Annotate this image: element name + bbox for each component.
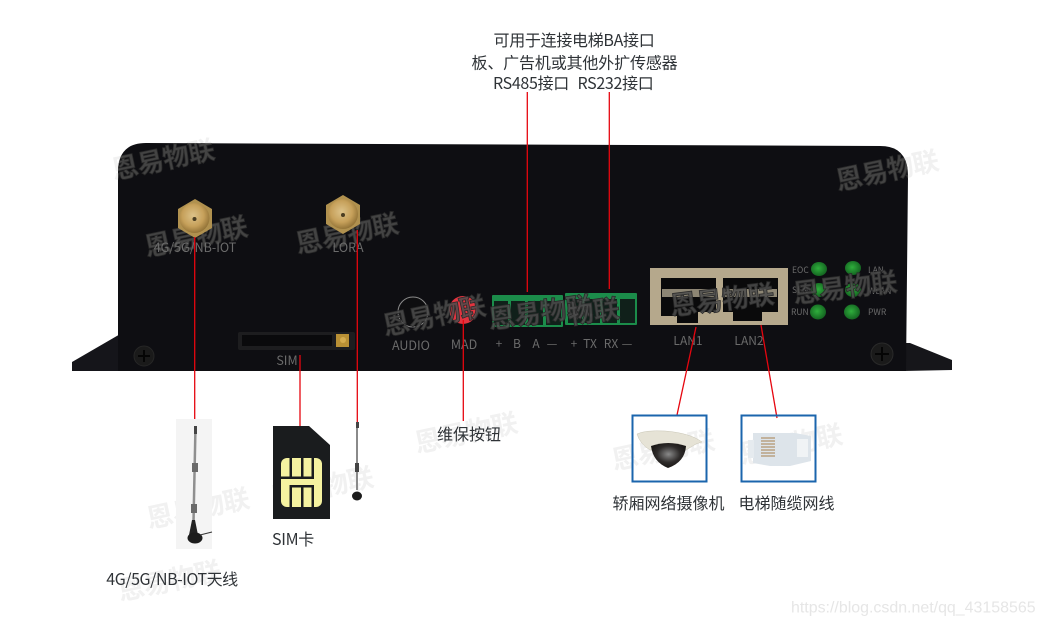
RS232 terminal block: RX xyxy=(604,335,618,352)
AUDIO jack: AUDIO xyxy=(392,335,430,354)
RS485 terminal block: — xyxy=(547,335,558,352)
connector: LORA SMA: LORA xyxy=(332,237,364,256)
light watermarks on the white background: 恩易物联 xyxy=(108,128,217,187)
top callout text: 可用于连接电梯BA接口 xyxy=(494,27,654,51)
top callout text: RS232接口 xyxy=(578,70,654,94)
label: car network camera: 轿厢网络摄像机 xyxy=(612,490,725,514)
RS232 terminal block: + xyxy=(571,335,578,352)
antenna: 4G/5G/NB-IoT xyxy=(176,419,212,549)
light watermarks on the white background: 恩易物联 xyxy=(267,455,376,515)
light watermarks on the white background xyxy=(108,128,942,609)
connector: LORA SMA xyxy=(326,195,364,256)
icon: elevator cable RJ45 plug xyxy=(742,416,816,482)
light watermarks on the white background: 恩易物联 xyxy=(736,412,845,472)
LAN ports: LAN1 xyxy=(673,332,703,349)
connector: 4G/5G/NB-IoT SMA: 4G/5G/NB-IOT xyxy=(154,237,237,256)
status LEDs: LAN xyxy=(868,264,884,276)
leader lines xyxy=(195,92,777,428)
RS232 terminal block xyxy=(565,293,637,352)
light watermarks on the white background: 恩易物联 xyxy=(608,418,717,478)
dark watermarks over the ports xyxy=(384,269,898,336)
light watermarks on the white background: 恩易物联 xyxy=(832,139,942,198)
SIM slot xyxy=(238,332,355,369)
light watermarks on the white background: 恩易物联 xyxy=(114,549,224,609)
dark watermarks behind the antenna connectors: 恩易物联 xyxy=(832,139,942,198)
dark watermarks behind the antenna connectors: 恩易物联 xyxy=(292,202,401,261)
label: 4G/5G/NB-IoT antenna: 4G/5G/NB-IOT天线 xyxy=(106,566,238,590)
label: elevator cable: 电梯随缆网线 xyxy=(738,490,835,514)
RS485 terminal block: A xyxy=(532,335,540,352)
light watermarks on the white background: 恩易物联 xyxy=(143,476,252,536)
status LEDs xyxy=(791,261,891,320)
icon: car network camera xyxy=(632,416,706,482)
dark watermarks behind the antenna connectors: 恩易物联 xyxy=(141,205,250,264)
chassis body xyxy=(118,143,908,371)
SIM slot: SIM xyxy=(276,350,298,369)
dark watermarks over the ports: 恩易物联 xyxy=(791,260,899,311)
dark watermarks over the ports: 恩易物联 xyxy=(379,284,489,344)
right mounting flange xyxy=(904,343,952,371)
icon: SIM card xyxy=(273,426,330,519)
source URL watermark: https://blog.csdn.net/qq_43158565 xyxy=(791,600,1036,616)
top callout text xyxy=(471,27,678,94)
top callout text: RS485接口 xyxy=(493,70,569,94)
LAN ports xyxy=(650,268,788,349)
label: maintenance button: 维保按钮 xyxy=(437,421,501,445)
dark watermarks over the ports: 恩易物联 xyxy=(486,284,594,337)
AUDIO jack xyxy=(392,297,430,354)
connector: 4G/5G/NB-IoT SMA xyxy=(154,199,237,256)
MAD button: MAD xyxy=(451,334,477,353)
dark watermarks behind the antenna connectors xyxy=(108,128,942,264)
RS485 terminal block: B xyxy=(513,335,521,352)
status LEDs: SEN xyxy=(792,284,808,296)
RS485 terminal block: + xyxy=(496,335,503,352)
top callout text: 板、广告机或其他外扩传感器 xyxy=(471,50,678,74)
status LEDs: PWR xyxy=(868,306,887,318)
light watermarks on the white background: 恩易物联 xyxy=(411,401,520,461)
antenna: LoRa xyxy=(352,422,362,500)
MAD button xyxy=(449,296,477,353)
status LEDs: WLAN xyxy=(868,285,891,297)
status LEDs: RUN xyxy=(791,306,809,318)
dark watermarks over the ports: 物联 xyxy=(564,287,621,332)
status LEDs: EOC xyxy=(792,264,809,276)
LAN ports: LAN2 xyxy=(734,332,764,349)
left mounting flange xyxy=(72,333,122,371)
device: gateway front panel xyxy=(72,128,952,371)
RS485 terminal block xyxy=(492,295,563,352)
RS232 terminal block: — xyxy=(622,335,633,352)
RS232 terminal block: TX xyxy=(583,335,597,352)
dark watermarks over the ports: 恩易物联 xyxy=(668,272,776,323)
mounting screws xyxy=(134,343,893,366)
dark watermarks behind the antenna connectors: 恩易物联 xyxy=(108,128,217,187)
label: SIM card: SIM卡 xyxy=(272,526,314,550)
